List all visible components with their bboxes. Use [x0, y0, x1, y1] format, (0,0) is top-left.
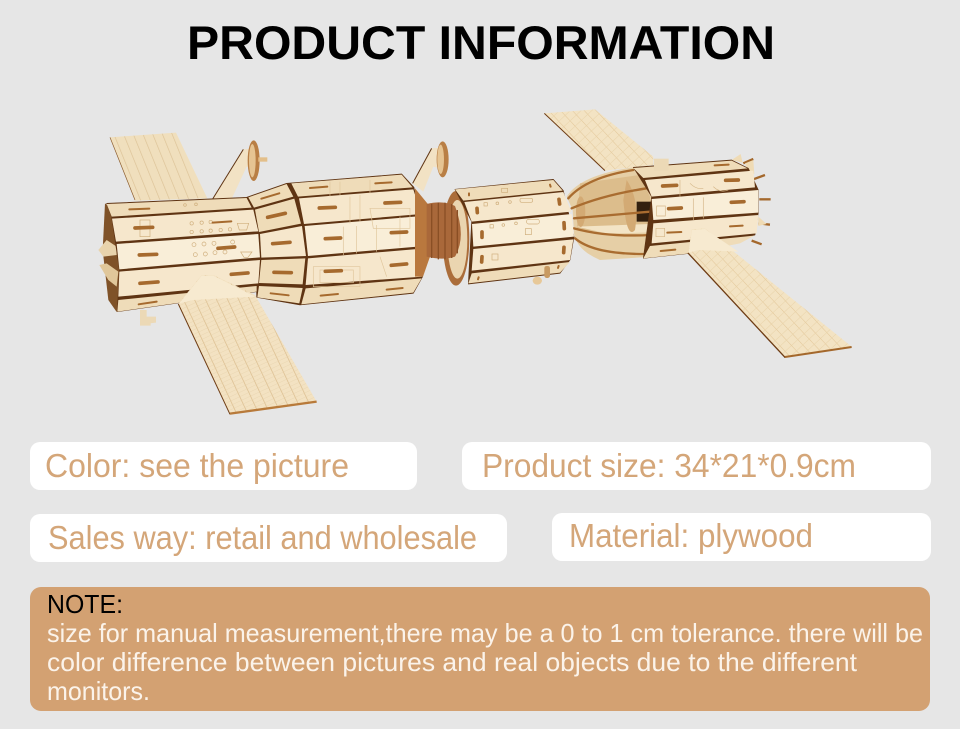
right module slots	[661, 165, 744, 251]
middle module slots and pegs	[469, 185, 564, 285]
solar panel: upper right	[544, 109, 653, 171]
solar panel: lower right	[688, 228, 852, 357]
rear module engraved dots	[140, 203, 252, 257]
note text: size for manual measurement,there may be a 0 to 1 cm tolerance. there will be	[47, 618, 923, 648]
info box: color	[30, 442, 417, 490]
note text: color difference between pictures and real objects due to the different	[47, 647, 858, 677]
tapered waist panels	[248, 184, 306, 303]
cork docking collar	[415, 188, 461, 277]
info box: product size: Product size: 34*21*0.9cm	[482, 447, 856, 484]
info box: sales way: Sales way: retail and wholesale	[48, 519, 477, 556]
solar panel: upper left	[110, 133, 207, 201]
docking ring	[443, 191, 469, 286]
left station section	[98, 133, 449, 414]
note text: monitors.	[47, 676, 150, 706]
right module engraved lines	[656, 180, 728, 237]
middle module dark underlay	[455, 179, 574, 284]
note panel	[30, 587, 930, 711]
slots	[129, 182, 407, 304]
antenna bracket: right	[413, 141, 449, 192]
rear module panels	[107, 198, 260, 312]
middle module panels	[455, 180, 574, 283]
right module spikes	[732, 154, 771, 244]
right station section	[415, 109, 852, 357]
rear end cap	[98, 203, 122, 312]
small peg	[140, 310, 156, 326]
title: PRODUCT INFORMATION	[187, 16, 775, 69]
info box: material	[552, 513, 931, 561]
antenna bracket: left	[208, 140, 267, 206]
note text	[47, 618, 923, 706]
main module panels	[291, 175, 425, 304]
module body dark underlay	[107, 174, 425, 312]
middle module engraved marks	[484, 188, 539, 260]
info box: color: Color: see the picture	[45, 447, 349, 484]
note heading: NOTE:	[47, 589, 123, 619]
main module engraved circuit lines	[313, 180, 410, 287]
right module panels	[633, 159, 758, 258]
solar panel: lower left	[178, 275, 317, 414]
right module dark underlay	[633, 160, 758, 258]
open cage section	[567, 167, 653, 260]
illustration: wooden space station model	[98, 109, 852, 414]
info box: material: Material: plywood	[569, 517, 813, 554]
info box: product size	[462, 442, 931, 490]
